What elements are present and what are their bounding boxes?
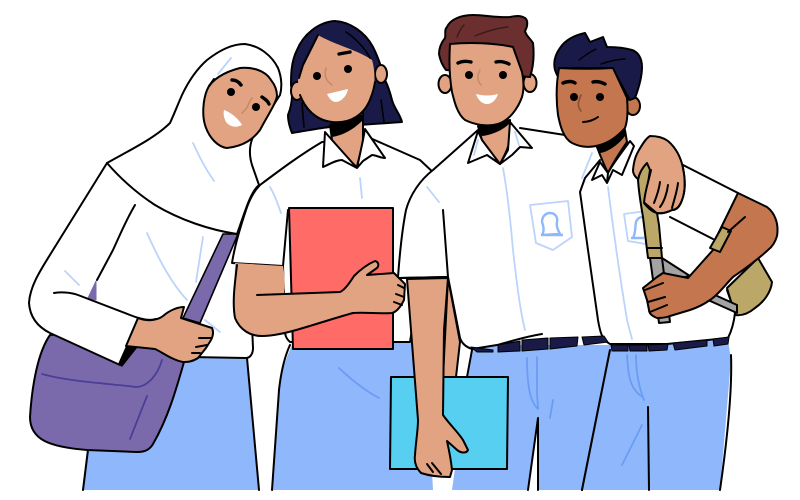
hair xyxy=(554,33,642,100)
back arm xyxy=(443,278,460,377)
sleeve band xyxy=(710,227,731,252)
neck and shadow xyxy=(478,120,510,164)
collar xyxy=(468,122,532,164)
belts xyxy=(471,336,729,352)
arm holding book xyxy=(234,261,405,336)
upper backpack strap xyxy=(638,163,662,258)
left arm sleeve xyxy=(29,163,139,365)
arm xyxy=(643,193,778,318)
skirt xyxy=(82,340,259,490)
student: girl with red book xyxy=(232,21,436,490)
shirt torso xyxy=(97,190,262,358)
hair strands xyxy=(579,49,625,64)
ears xyxy=(438,75,452,93)
shirt creases xyxy=(147,233,220,332)
shirt xyxy=(232,138,436,342)
backpack xyxy=(727,258,772,315)
eyes, brows, nose and smile xyxy=(224,80,269,127)
eyes, brow, nose and smile xyxy=(313,52,352,102)
face xyxy=(449,43,524,125)
eyes, brows, nose and smile xyxy=(458,61,509,104)
collar xyxy=(592,141,634,183)
shirt xyxy=(399,128,600,349)
red book xyxy=(289,208,393,349)
trousers xyxy=(452,345,612,490)
face xyxy=(203,68,277,148)
student: boy with blue book xyxy=(390,15,612,490)
sleeve fold line xyxy=(443,210,448,277)
shirt xyxy=(580,145,738,344)
eyes, brows, nose and smile xyxy=(563,82,605,122)
face xyxy=(298,35,374,122)
student: girl in hijab with purple bag xyxy=(29,44,281,490)
school pocket xyxy=(624,211,652,245)
face xyxy=(557,68,628,147)
pocket emblem xyxy=(631,217,646,238)
hand on strap xyxy=(126,307,213,362)
hijab folds xyxy=(193,58,231,181)
hair xyxy=(439,15,534,77)
blue book xyxy=(390,377,508,469)
hair strands xyxy=(457,25,508,37)
ear xyxy=(626,97,640,115)
lower strap xyxy=(650,258,670,323)
purple strap behind back xyxy=(88,281,96,300)
front arm and hand xyxy=(407,278,468,477)
hair strands xyxy=(302,32,384,127)
bag seams xyxy=(42,360,162,439)
skirt xyxy=(272,342,433,490)
neck and shadow xyxy=(330,112,363,167)
student: boy with backpack xyxy=(471,33,778,490)
shoulder strap xyxy=(183,234,238,323)
hijab notch xyxy=(209,79,214,86)
hand over shoulder xyxy=(633,136,685,213)
pocket emblem xyxy=(541,213,563,235)
skirt crease xyxy=(339,368,379,398)
shoulder bag xyxy=(30,330,184,452)
school pocket xyxy=(530,201,572,250)
collar xyxy=(323,129,385,168)
hijab xyxy=(107,44,281,234)
trousers xyxy=(582,340,731,490)
cuff shadow xyxy=(118,346,137,367)
hair xyxy=(288,21,402,133)
ears xyxy=(291,82,303,100)
neck and shadow xyxy=(597,130,627,173)
backpack webbing xyxy=(662,258,737,313)
